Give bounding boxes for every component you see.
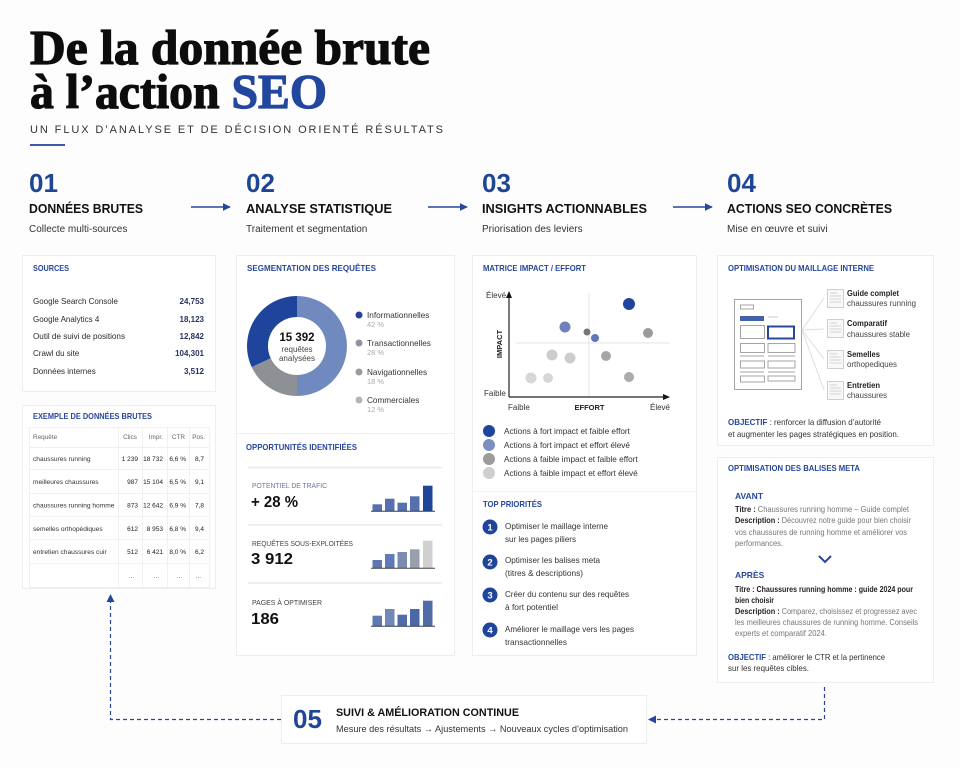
before block: Titre : Chaussures running homme – Guide complet [735, 505, 910, 514]
after block: les meilleures chaussures de running homme. Conseils [735, 618, 918, 627]
after block [735, 570, 918, 638]
data table: ... [154, 573, 159, 580]
data table: 873 [127, 502, 138, 510]
before block: vos chaussures de running homme et améliorer vos [735, 528, 907, 537]
panel: internal linking: OPTIMISATION DU MAILLAGE INTERNE [728, 263, 874, 273]
priority 4: transactionnelles [505, 637, 567, 647]
thumbnail: guide: Guide complet [847, 289, 899, 298]
arrow: feedback to raw data [106, 594, 281, 720]
panel: statistical analysis: OPPORTUNITÉS IDENTIFIÉES [246, 442, 357, 452]
priority 2: Optimiser les balises meta [505, 555, 600, 565]
donut legend [356, 311, 431, 414]
donut chart: 15 392 [279, 332, 315, 344]
panel: meta tags: OPTIMISATION DES BALISES META [728, 463, 860, 473]
data table: Pos. [192, 434, 205, 441]
impact effort matrix: IMPACT [495, 329, 504, 358]
metric: under-exploited queries: REQUÊTES SOUS-EXPLOITÉES [252, 539, 353, 548]
priority 4: Améliorer le maillage vers les pages [505, 624, 634, 634]
data table: 8,0 % [169, 549, 186, 556]
step 04 header: Mise en œuvre et suivi [727, 224, 828, 235]
data table: 1 239 [122, 456, 138, 463]
data table: 612 [127, 526, 138, 533]
panel: actionable insights: MATRICE IMPACT / EFFORT [483, 263, 586, 273]
matrix legend: Actions à faible impact et faible effort [504, 455, 638, 464]
data table: 6,5 % [169, 479, 186, 486]
thumbnail: entretien [828, 381, 887, 400]
panel: internal linking: OBJECTIF : renforcer la diffusion d’autorité [728, 418, 881, 427]
data table: 987 [127, 479, 138, 486]
data table: 6,9 % [169, 502, 186, 510]
data table: Requête [33, 434, 58, 441]
metric: traffic potential: POTENTIEL DE TRAFIC [252, 481, 327, 490]
step 03 header: INSIGHTS ACTIONNABLES [482, 201, 647, 216]
metric: under-exploited queries: 3 912 [251, 551, 293, 568]
data table: 6,6 % [169, 456, 186, 463]
impact effort matrix: Élevé [650, 403, 671, 412]
after block: experts et comparatif 2024. [735, 629, 827, 638]
arrow: step 2 to 3 [428, 206, 467, 208]
page wireframe [734, 300, 802, 390]
panel: sources: Google Search Console [33, 297, 119, 306]
panel: sources: Google Analytics 4 [33, 315, 100, 324]
data table: CTR [172, 434, 185, 441]
impact effort matrix: Faible [508, 403, 530, 412]
step 02 header: Traitement et segmentation [246, 224, 367, 235]
arrow: step 1 to 2 [191, 206, 230, 208]
after block: Description : Comparez, choisissez et progressez avec [735, 607, 917, 616]
panel: meta tags: sur les requêtes cibles. [728, 664, 809, 673]
panel: sources: 24,753 [180, 297, 205, 306]
metric: traffic potential: + 28 % [251, 494, 298, 511]
data table: 8 953 [147, 526, 163, 533]
data table: chaussures running homme [33, 502, 115, 510]
donut legend: Navigationnelles [367, 368, 427, 377]
thumbnail: comparatif: chaussures stable [847, 330, 911, 339]
panel: sources: Outil de suivi de positions [33, 332, 125, 341]
thumbnail: entretien: Entretien [847, 381, 880, 390]
step 01 header: 01 [29, 168, 58, 198]
step 01 header [29, 168, 143, 235]
panel: meta tags [718, 458, 934, 682]
data table [29, 427, 210, 588]
panel: sources: Crawl du site [33, 349, 80, 358]
data table: 18 732 [143, 456, 163, 463]
step 02 header: 02 [246, 168, 275, 198]
data table: 6 421 [147, 549, 163, 556]
matrix legend: Actions à fort impact et effort élevé [504, 441, 630, 450]
donut legend: 42 % [367, 320, 384, 329]
data table: entretien chaussures cuir [33, 549, 107, 556]
priority 3: Créer du contenu sur des requêtes [505, 589, 629, 599]
metric: under-exploited queries [251, 539, 435, 568]
impact effort matrix: Élevé [486, 291, 507, 300]
donut legend: Commerciales [367, 396, 419, 405]
step 03 header [482, 168, 647, 235]
title [30, 20, 430, 119]
step 04 header [727, 168, 892, 235]
data table: ... [196, 573, 201, 580]
panel: internal linking: et augmenter les pages stratégiques en position. [728, 430, 899, 439]
donut legend: 12 % [367, 405, 384, 414]
donut legend: 28 % [367, 348, 384, 357]
panel: sources: 12,842 [180, 332, 205, 341]
panel: sources: 104,301 [175, 349, 205, 358]
thumbnail: comparatif [828, 319, 911, 339]
thumbnail: semelles: Semelles [847, 350, 881, 359]
arrow: step 3 to 4 [673, 206, 712, 208]
metric: pages to optimise: 186 [251, 611, 279, 628]
priority 3: à fort potentiel [505, 602, 558, 612]
data table: 8,7 [195, 456, 204, 463]
step 03 header: 03 [482, 168, 511, 198]
panel: sources [22, 256, 216, 392]
after block: bien choisir [735, 596, 774, 605]
data table: meilleures chaussures [33, 479, 99, 486]
data table: 9,1 [195, 479, 204, 486]
step 01 header: DONNÉES BRUTES [29, 201, 143, 216]
step 04 header: 04 [727, 168, 756, 198]
after block: Titre : Chaussures running homme : guide 2024 pour [735, 585, 913, 594]
panel: actionable insights: TOP PRIORITÉS [483, 499, 542, 509]
priority 1: 1 [487, 522, 493, 534]
thumbnail: semelles: orthopediques [847, 360, 897, 369]
step 02 header [246, 168, 392, 235]
data table: 6,2 [195, 549, 204, 556]
data table: Impr. [149, 434, 163, 441]
thumbnail: entretien: chaussures [847, 391, 887, 400]
thumbnail: semelles [828, 350, 897, 369]
before block: AVANT [735, 491, 764, 501]
step 04 header: ACTIONS SEO CONCRÈTES [727, 201, 892, 216]
subtitle: UN FLUX D’ANALYSE ET DE DÉCISION ORIENTÉ RÉSULTATS [30, 123, 443, 136]
priority 4: 4 [487, 626, 493, 636]
donut legend: Transactionnelles [367, 339, 431, 348]
priority 2: (titres & descriptions) [505, 568, 583, 578]
panel: step 05: SUIVI & AMÉLIORATION CONTINUE [336, 706, 519, 719]
priority 2 [482, 554, 600, 578]
panel: internal linking [718, 256, 934, 446]
data table: 15 104 [143, 479, 163, 486]
step 03 header: Priorisation des leviers [482, 224, 583, 235]
thumbnail: guide [828, 289, 916, 308]
donut legend: 18 % [367, 377, 384, 386]
panel: step 05 [282, 696, 646, 744]
data table: semelles orthopédiques [33, 526, 103, 533]
arrow: actions to monitoring [648, 687, 824, 724]
matrix legend [483, 425, 638, 479]
priority 4 [482, 622, 634, 647]
panel: raw data example [22, 406, 216, 588]
impact effort matrix: EFFORT [574, 403, 605, 412]
panel: step 05: 05 [293, 704, 322, 734]
panel: statistical analysis [236, 256, 454, 656]
impact effort matrix [484, 291, 671, 412]
priority 1 [482, 520, 608, 544]
metric: traffic potential [251, 481, 435, 511]
data table: ... [129, 573, 134, 580]
data table: Clics [123, 434, 137, 441]
data table: 9,4 [195, 526, 204, 533]
after block: APRÈS [735, 570, 765, 580]
donut chart: requêtes [281, 345, 313, 354]
data table: 512 [127, 549, 138, 556]
title: De la donnée brute [30, 20, 430, 75]
title: à l’action SEO [30, 64, 327, 119]
priority 1: Optimiser le maillage interne [505, 521, 608, 531]
panel: sources: 3,512 [184, 367, 205, 376]
before block: performances. [735, 539, 783, 548]
matrix legend: Actions à faible impact et effort élevé [504, 469, 638, 478]
priority 3 [482, 588, 629, 612]
thumbnail: guide: chaussures running [847, 299, 916, 308]
priority 2: 2 [487, 558, 493, 568]
data table: 6,8 % [169, 526, 186, 533]
matrix legend: Actions à fort impact et faible effort [504, 427, 631, 436]
panel: actionable insights [472, 256, 696, 656]
priority 3: 3 [487, 590, 493, 602]
panel: raw data example: EXEMPLE DE DONNÉES BRUTES [33, 411, 152, 421]
step 01 header: Collecte multi-sources [29, 224, 127, 235]
connector lines [802, 298, 824, 390]
before block: Description : Découvrez notre guide pour bien choisir [735, 516, 911, 525]
metric: pages to optimise: PAGES À OPTIMISER [252, 598, 322, 607]
data table: ... [177, 573, 182, 580]
step 02 header: ANALYSE STATISTIQUE [246, 201, 392, 216]
chevron down [819, 556, 831, 562]
panel: statistical analysis: SEGMENTATION DES REQUÊTES [247, 262, 376, 273]
data table: 7,8 [195, 502, 204, 510]
thumbnail: comparatif: Comparatif [847, 319, 887, 328]
panel: sources: 18,123 [180, 315, 205, 324]
impact effort matrix: Faible [484, 389, 506, 398]
panel: step 05: Mesure des résultats → Ajustements → Nouveaux cycles d’optimisation [336, 724, 628, 734]
panel: meta tags: OBJECTIF : améliorer le CTR et la pertinence [728, 653, 885, 662]
donut legend: Informationnelles [367, 311, 429, 320]
donut chart [247, 296, 347, 396]
data table: 12 642 [143, 502, 163, 510]
priority 1: sur les pages piliers [505, 534, 576, 544]
metric: pages to optimise [251, 598, 435, 628]
panel: sources: SOURCES [33, 263, 69, 273]
panel: sources: Données internes [33, 367, 96, 376]
donut chart: analysées [279, 354, 315, 363]
before block [735, 491, 911, 548]
data table: chaussures running [33, 456, 91, 463]
